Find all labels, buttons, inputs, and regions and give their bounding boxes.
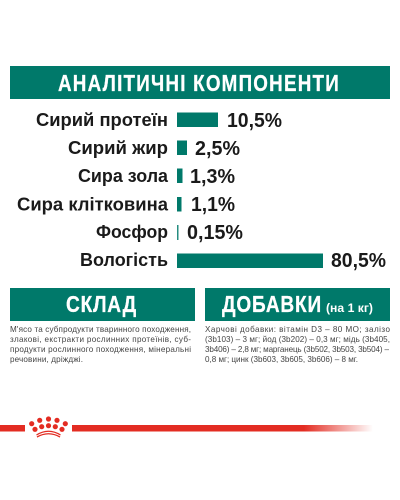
additives heading text: ДОБАВКИ bbox=[222, 291, 322, 317]
row: crude protein: Сирий протеїн bbox=[36, 109, 168, 130]
row: phosphorus bbox=[96, 221, 243, 244]
row: crude ash bbox=[78, 165, 235, 188]
row: moisture: 80,5% bbox=[331, 250, 386, 272]
panel: analytical components heading bbox=[10, 66, 390, 99]
footer: red line with crown logo bbox=[0, 416, 373, 437]
row: crude fat: 2,5% bbox=[195, 138, 240, 160]
additives unit note: (на 1 кг) bbox=[326, 303, 373, 315]
text block: composition: М'ясо та субпродукти тваринного походження, bbox=[10, 325, 191, 334]
text block: composition: продукти рослинного походження, мінеральні bbox=[10, 345, 191, 354]
text block: composition: злакові, екстракти рослинних протеїнів, суб- bbox=[10, 335, 191, 344]
row: crude fat bbox=[68, 137, 240, 160]
row: crude ash: Сира зола bbox=[78, 165, 169, 186]
row: crude protein: 10,5% bbox=[227, 110, 282, 132]
row: moisture: Вологість bbox=[80, 249, 168, 270]
row: crude fibre: 1,1% bbox=[191, 194, 235, 216]
row: crude protein bbox=[36, 109, 282, 132]
text block: additives bbox=[205, 325, 390, 364]
text block: composition: речовини, дріжджі. bbox=[10, 355, 83, 364]
composition heading text: СКЛАД bbox=[66, 291, 137, 317]
text block: additives: 3b406) – 2,8 мг; марганець (3b502, 3b503, 3b504) – bbox=[205, 345, 389, 354]
text block: additives: 0,8 мг; цинк (3b603, 3b605, 3b606) – 8 мг. bbox=[205, 355, 358, 364]
text block: composition bbox=[10, 325, 191, 364]
text block: additives: Харчові добавки: вітамін D3 – 80 МО; залізо bbox=[205, 325, 390, 334]
row: moisture bbox=[80, 249, 386, 272]
row: crude fibre bbox=[17, 194, 235, 216]
panel: composition bbox=[10, 288, 195, 321]
row: crude ash: 1,3% bbox=[190, 166, 235, 188]
panel: additives bbox=[205, 288, 390, 321]
text block: additives: (3b103) – 3 мг; йод (3b202) – 0,3 мг; мідь (3b405, bbox=[205, 335, 390, 344]
row: phosphorus: 0,15% bbox=[187, 222, 243, 244]
chart: analytical components bars bbox=[17, 109, 386, 272]
icon: royal crown logo bbox=[29, 416, 68, 437]
row: phosphorus: Фосфор bbox=[96, 221, 168, 242]
row: crude fat: Сирий жир bbox=[68, 137, 168, 158]
heading text: АНАЛІТИЧНІ КОМПОНЕНТИ bbox=[58, 70, 340, 96]
row: crude fibre: Сира клітковина bbox=[17, 194, 169, 214]
